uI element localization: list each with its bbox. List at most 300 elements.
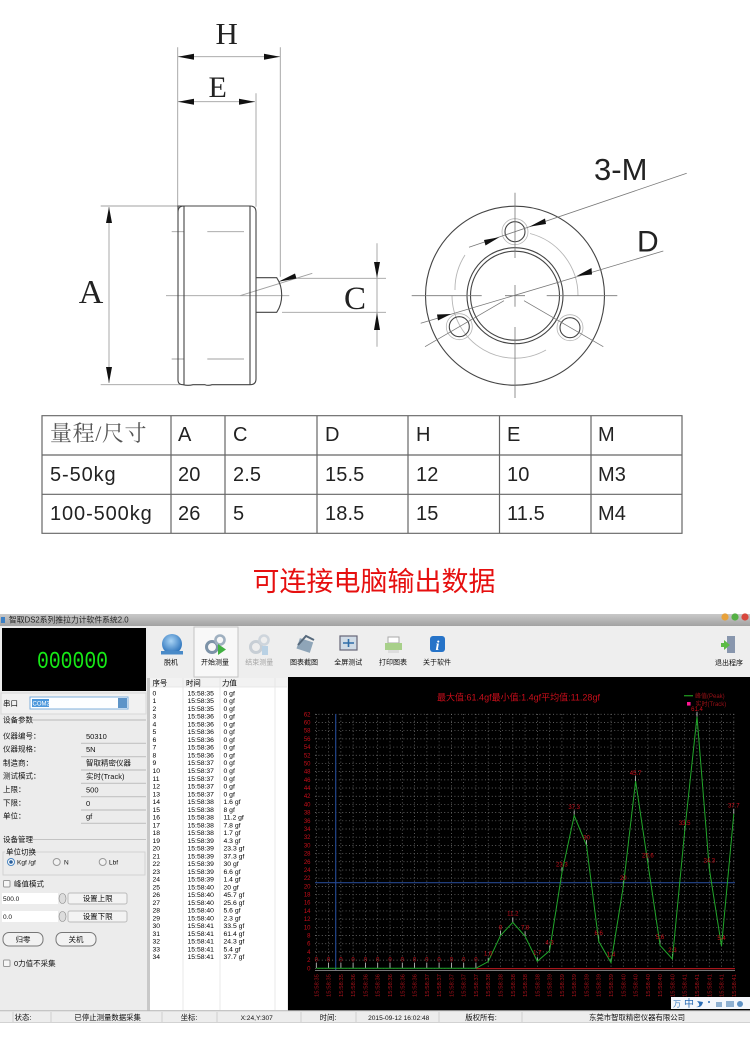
x axis time labels: 15:58:35	[314, 973, 320, 997]
list rows: 24	[152, 877, 160, 884]
device parameters panel: 下限：	[3, 798, 26, 807]
list rows: 15:58:41	[188, 931, 214, 938]
point value labels: 0	[413, 958, 417, 964]
y axis labels: 6	[307, 942, 311, 948]
y axis labels: 14	[304, 909, 311, 915]
list rows: 21	[152, 853, 160, 860]
data list	[147, 678, 287, 1011]
y axis labels: 28	[304, 852, 311, 858]
y axis labels: 18	[304, 892, 311, 898]
flange outer circle	[426, 206, 604, 385]
list header: 力值	[222, 678, 237, 688]
table header row: H	[416, 424, 431, 446]
list header: 时间	[186, 678, 201, 688]
y axis labels: 42	[304, 794, 311, 800]
x axis time labels: 15:58:38	[523, 973, 529, 997]
y axis labels: 22	[304, 876, 311, 882]
device management panel: 单位切换	[6, 846, 36, 856]
table header row: M	[598, 424, 615, 446]
status bar: 已停止测量数据采集	[74, 1013, 142, 1022]
point value labels: 61.4	[691, 707, 703, 713]
status bar: 2015-09-12 16:02:48	[368, 1015, 430, 1022]
y axis labels: 10	[304, 925, 311, 931]
sensor body outline	[178, 206, 256, 385]
list rows: 15:58:39	[188, 861, 214, 868]
icon: start gears	[206, 636, 226, 655]
list rows: 10	[152, 768, 160, 775]
sensor stud	[256, 278, 282, 312]
list rows: 1.4 gf	[224, 877, 241, 884]
label C: C	[344, 281, 366, 317]
list rows: 15:58:38	[188, 830, 214, 837]
y axis labels: 30	[304, 843, 311, 849]
device parameters panel: 单位：	[3, 811, 26, 821]
y axis labels: 36	[304, 819, 311, 825]
data line	[316, 717, 734, 968]
list rows: 5	[152, 729, 156, 736]
point value labels: 0	[437, 958, 441, 964]
x axis time labels: 15:58:39	[584, 974, 590, 997]
x axis time labels: 15:58:39	[609, 974, 615, 997]
point value labels: 11.2	[507, 912, 519, 918]
list rows: 0 gf	[224, 721, 235, 728]
table row 5-50kg: 12	[416, 464, 438, 486]
list rows: 15:58:37	[188, 760, 214, 767]
y axis labels: 54	[304, 745, 311, 751]
x axis time labels: 15:58:38	[535, 973, 541, 997]
table row 5-50kg: 20	[178, 464, 200, 486]
list rows: 16	[152, 815, 160, 822]
x axis time labels: 15:58:39	[548, 974, 554, 997]
point value labels: 8	[499, 926, 503, 932]
y axis labels: 44	[304, 786, 311, 792]
list rows: 12	[152, 784, 160, 790]
list rows: 33	[152, 946, 160, 954]
unit radio buttons: N	[64, 860, 69, 866]
lower limit input: 0.0	[3, 914, 12, 921]
point value labels: 37.7	[728, 804, 740, 810]
y axis labels: 32	[304, 835, 311, 841]
list rows: 22	[152, 861, 160, 868]
list rows: 18	[152, 830, 160, 837]
list rows: 25	[152, 884, 160, 891]
point value labels: 0	[462, 958, 466, 964]
point value labels: 0	[474, 958, 478, 964]
point value labels: 0	[425, 958, 429, 964]
list rows: 15:58:40	[188, 900, 214, 907]
y axis labels: 58	[304, 729, 311, 735]
input method bar: 中	[684, 997, 694, 1010]
device parameters panel: 设备参数	[3, 715, 33, 725]
chart legend: 峰值(Peak)	[695, 692, 725, 700]
table row 100-500kg: 5	[233, 503, 244, 525]
x axis time labels: 15:58:37	[437, 974, 443, 997]
point value labels: 0	[376, 958, 380, 964]
window title bar: 智取DS2系列推拉力计软件系统2.0	[9, 614, 129, 624]
list rows: 2.3 gf	[224, 915, 241, 922]
icon: about info	[430, 636, 445, 654]
y axis labels: 62	[304, 712, 311, 718]
x axis time labels: 15:58:38	[498, 973, 504, 997]
serial port selector: COM3	[32, 702, 50, 708]
list rows: 15:58:41	[188, 939, 214, 946]
device parameters panel: 智取精密仪器	[86, 758, 131, 768]
y axis labels: 34	[304, 827, 311, 833]
x axis time labels: 15:58:39	[572, 974, 578, 997]
list rows: 15:58:40	[188, 908, 214, 915]
toolbar labels: 关于软件	[423, 658, 451, 666]
label D: D	[637, 226, 659, 259]
list rows: 13	[152, 791, 160, 798]
list rows: 15:58:37	[188, 791, 214, 798]
list rows: 33.5 gf	[224, 923, 244, 930]
table row 5-50kg: M3	[598, 464, 626, 486]
list rows: 23	[152, 869, 160, 876]
list rows: 15:58:35	[188, 690, 214, 697]
icon: globe disconnect	[161, 634, 183, 654]
device parameters panel	[3, 715, 146, 823]
list rows: 19	[152, 838, 160, 845]
table row 100-500kg: 15	[416, 503, 438, 525]
toolbar labels: 全屏测试	[334, 658, 362, 666]
x axis time labels: 15:58:40	[658, 973, 664, 997]
x axis time labels: 15:58:37	[449, 974, 455, 997]
upper limit input: 设置上限	[83, 893, 113, 903]
list rows: 0	[152, 690, 156, 697]
list rows: 15:58:41	[188, 923, 214, 930]
device parameters panel: 50310	[86, 732, 107, 741]
bolt circle arcs	[452, 234, 578, 358]
x axis time labels: 15:58:40	[670, 973, 676, 997]
x axis time labels: 15:58:40	[634, 973, 640, 997]
list rows: 23.3 gf	[224, 846, 244, 853]
list rows: 1.6 gf	[224, 799, 241, 806]
list rows: 15:58:40	[188, 915, 214, 922]
upper limit input: 500.0	[3, 896, 20, 903]
zero button	[3, 932, 43, 946]
table header row: C	[233, 424, 248, 446]
digital readout	[2, 628, 146, 691]
device parameters panel: 制造商：	[3, 757, 33, 767]
y axis labels: 26	[304, 860, 311, 866]
y axis labels: 50	[304, 762, 311, 768]
x axis time labels: 15:58:39	[597, 974, 603, 997]
list rows: 20 gf	[224, 884, 239, 891]
digital readout: 000000	[37, 649, 108, 676]
zero button: 归零	[16, 934, 31, 944]
list rows: 15:58:39	[188, 838, 214, 845]
x axis time labels: 15:58:41	[707, 974, 713, 997]
list rows: 24.3 gf	[224, 939, 244, 946]
leader arrows	[437, 218, 592, 320]
list rows: 15:58:38	[188, 815, 214, 822]
chart legend	[684, 692, 726, 708]
x axis time labels: 15:58:36	[351, 973, 357, 997]
list rows: 7	[152, 745, 156, 752]
y axis labels: 0	[307, 966, 311, 972]
x axis time labels: 15:58:38	[486, 973, 492, 997]
y axis labels: 46	[304, 778, 311, 784]
point value labels: 2.3	[668, 948, 677, 954]
point value labels: 0	[450, 958, 454, 964]
list rows: 5.4 gf	[224, 946, 241, 954]
x axis time labels: 15:58:40	[646, 973, 652, 997]
status bar: 版权所有:	[465, 1013, 497, 1022]
point value labels: 20	[620, 876, 627, 882]
x axis time labels: 15:58:40	[621, 973, 627, 997]
list rows: 2	[152, 706, 156, 713]
list rows: 5.6 gf	[224, 908, 241, 915]
point value labels: 1.6	[484, 952, 493, 958]
dimension arrows	[106, 54, 380, 383]
device parameters panel: 5N	[86, 745, 96, 754]
table row 100-500kg: M4	[598, 503, 626, 525]
label H: H	[216, 16, 238, 51]
list rows: 1.7 gf	[224, 830, 241, 837]
point value labels: 5.6	[656, 935, 665, 941]
x axis time labels: 15:58:35	[339, 973, 345, 997]
list rows: 15:58:40	[188, 892, 214, 899]
status bar: 状态:	[15, 1013, 31, 1022]
list rows: 9	[152, 760, 156, 767]
x axis time labels: 15:58:41	[683, 974, 689, 997]
list rows: 0 gf	[224, 737, 235, 744]
list rows: 31	[152, 931, 160, 938]
serial port selector	[1, 693, 146, 714]
list rows: 15:58:35	[188, 706, 214, 713]
list rows: 15:58:41	[188, 946, 214, 954]
y axis labels: 2	[307, 958, 311, 964]
point value labels: 1.4	[607, 952, 616, 958]
list rows: 15:58:39	[188, 853, 214, 860]
y axis labels: 16	[304, 901, 311, 907]
lower limit input	[2, 911, 127, 922]
list rows: 0 gf	[224, 698, 235, 705]
line chart	[288, 677, 750, 1011]
list rows: 0 gf	[224, 784, 235, 790]
size table	[42, 416, 682, 533]
table row 100-500kg: 11.5	[507, 503, 545, 525]
table row 5-50kg: 2.5	[233, 464, 261, 486]
y axis labels: 8	[307, 934, 311, 940]
list rows: 15:58:36	[188, 721, 214, 728]
y axis labels: 48	[304, 770, 311, 776]
list rows: 0 gf	[224, 776, 235, 783]
table row 100-500kg: 18.5	[325, 503, 364, 525]
three bolt holes	[449, 222, 580, 338]
list rows: 37.3 gf	[224, 853, 244, 860]
list rows: 30	[152, 923, 160, 930]
list header: 序号	[152, 678, 167, 688]
x axis time labels: 15:58:38	[511, 973, 517, 997]
y axis labels: 52	[304, 753, 311, 759]
side view technical drawing	[79, 16, 386, 385]
x axis time labels: 15:58:36	[363, 973, 369, 997]
list rows: 29	[152, 915, 160, 922]
device parameters panel: 仪器规格：	[3, 744, 40, 754]
table header row: A	[178, 424, 192, 446]
y axis labels: 4	[307, 950, 311, 956]
power off button	[56, 932, 96, 946]
status bar	[0, 1011, 750, 1023]
centre hole	[467, 248, 563, 344]
centre lines and leaders	[412, 173, 687, 398]
table row 5-50kg: 15.5	[325, 464, 364, 486]
x axis time labels: 15:58:39	[560, 974, 566, 997]
list rows: 27	[152, 900, 160, 907]
threshold lines	[335, 714, 337, 970]
list rows: 15:58:41	[188, 954, 214, 961]
x axis time labels: 15:58:37	[425, 974, 431, 997]
list rows: 3	[152, 714, 156, 721]
list rows: 15:58:40	[188, 884, 214, 891]
x axis time labels: 15:58:41	[720, 974, 726, 997]
label E: E	[209, 71, 227, 104]
toolbar labels: 打印图表	[379, 658, 407, 666]
toolbar labels: 结束测量	[245, 658, 273, 666]
list rows: 30 gf	[224, 861, 239, 868]
power off button: 关机	[68, 934, 84, 944]
list rows: 8 gf	[224, 807, 235, 814]
list rows: 14	[152, 799, 160, 806]
list rows: 15:58:39	[188, 846, 214, 853]
icon: printer	[385, 637, 402, 653]
point ticks	[316, 712, 734, 968]
list rows: 0 gf	[224, 760, 235, 767]
table header row: 量程/尺寸	[50, 421, 147, 446]
upper limit input	[2, 893, 127, 904]
point value labels: 0	[351, 958, 355, 964]
status bar: X:24,Y:307	[241, 1015, 273, 1022]
x axis time labels: 15:58:36	[400, 973, 406, 997]
y axis labels: 56	[304, 737, 311, 743]
point value labels: 6.6	[595, 931, 604, 937]
device management panel	[2, 834, 146, 968]
x axis time labels: 15:58:36	[412, 973, 418, 997]
y axis labels: 24	[304, 868, 311, 874]
window title bar	[0, 613, 750, 626]
label 3-M: 3-M	[594, 152, 647, 187]
list rows: 15:58:38	[188, 807, 214, 814]
heading: 可连接电脑输出数据	[252, 567, 496, 597]
x axis time labels: 15:58:37	[474, 974, 480, 997]
list rows: 15:58:36	[188, 729, 214, 736]
table header row	[50, 421, 615, 446]
list rows: 15:58:37	[188, 768, 214, 775]
point value labels: 23.3	[556, 862, 568, 868]
device parameters panel: 上限：	[3, 785, 26, 794]
y axis labels: 38	[304, 811, 311, 817]
point value labels: 30	[583, 836, 590, 842]
list rows: 15:58:36	[188, 745, 214, 752]
list rows: 15:58:37	[188, 776, 214, 783]
peak mode checkbox	[4, 879, 44, 889]
point value labels: 45.7	[630, 771, 642, 777]
list rows: 26	[152, 892, 160, 899]
front view technical drawing	[412, 152, 687, 398]
list rows: 20	[152, 846, 160, 853]
point value labels: 4.3	[545, 940, 554, 946]
list rows: 37.7 gf	[224, 954, 244, 961]
list rows: 32	[152, 939, 160, 946]
list rows: 15:58:36	[188, 737, 214, 744]
input method bar	[671, 997, 750, 1010]
serial port selector: 串口	[3, 699, 18, 708]
table row 5-50kg: 5-50kg	[50, 464, 117, 486]
point value labels: 24.3	[703, 858, 716, 864]
point value labels: 0	[401, 958, 405, 964]
list rows: 15:58:39	[188, 877, 214, 884]
list rows: 11.2 gf	[224, 815, 244, 822]
x axis time labels	[314, 973, 738, 997]
table header row: D	[325, 424, 340, 446]
zero value checkbox: 0力值不采集	[14, 958, 56, 968]
point value labels: 33.5	[679, 821, 691, 827]
list rows: 15:58:35	[188, 698, 214, 705]
list rows: 4.3 gf	[224, 838, 241, 845]
icon: screenshot	[296, 636, 314, 653]
peak mode checkbox: 峰值模式	[14, 879, 44, 889]
x axis time labels: 15:58:35	[327, 973, 333, 997]
list rows: 0 gf	[224, 745, 235, 752]
list rows: 34	[152, 954, 160, 961]
lower limit input: 设置下限	[83, 911, 113, 921]
y axis labels: 20	[304, 884, 311, 890]
point value labels: 7.8	[521, 926, 530, 932]
toolbar labels: 脱机	[164, 658, 178, 666]
device management panel: 设备管理	[3, 834, 33, 844]
icon: about info: i	[436, 639, 440, 654]
point value labels: 1.7	[533, 950, 542, 956]
software screenshot	[0, 613, 750, 1023]
device parameters panel: 仪器编号：	[3, 731, 40, 741]
chart legend: 实时(Track)	[696, 700, 726, 708]
list rows: 0 gf	[224, 791, 235, 798]
list rows: 15:58:36	[188, 752, 214, 760]
list rows: 8	[152, 752, 156, 760]
toolbar	[148, 626, 750, 678]
list rows: 15	[152, 807, 160, 814]
status bar: 东莞市智取精密仪器有限公司	[589, 1013, 685, 1022]
x axis time labels: 15:58:41	[732, 974, 738, 997]
device parameters panel: 0	[86, 799, 90, 808]
device parameters panel: 测试模式：	[3, 771, 40, 781]
unit radio buttons	[8, 858, 118, 866]
device parameters panel: 500	[86, 786, 99, 794]
status bar: 坐标:	[181, 1013, 197, 1022]
icon: fullscreen	[340, 636, 357, 650]
y axis labels: 40	[304, 802, 311, 808]
list rows: 28	[152, 908, 160, 915]
unit radio buttons: Lbf	[109, 860, 118, 866]
toolbar labels	[164, 658, 743, 667]
point value labels: 25.6	[642, 854, 654, 860]
list rows: 15:58:38	[188, 799, 214, 806]
x axis time labels: 15:58:37	[462, 974, 468, 997]
list rows: 0 gf	[224, 752, 235, 760]
status bar: 时间:	[320, 1013, 336, 1022]
list rows: 0 gf	[224, 768, 235, 775]
list rows: 0 gf	[224, 690, 235, 697]
icon: exit door	[721, 636, 735, 653]
list rows: 0 gf	[224, 706, 235, 713]
list rows: 15:58:39	[188, 869, 214, 876]
x axis time labels: 15:58:36	[388, 973, 394, 997]
list rows: 1	[152, 698, 156, 705]
icon: stop gears	[250, 636, 268, 655]
point value labels: 0	[364, 958, 368, 964]
table row 100-500kg: 26	[178, 503, 200, 525]
